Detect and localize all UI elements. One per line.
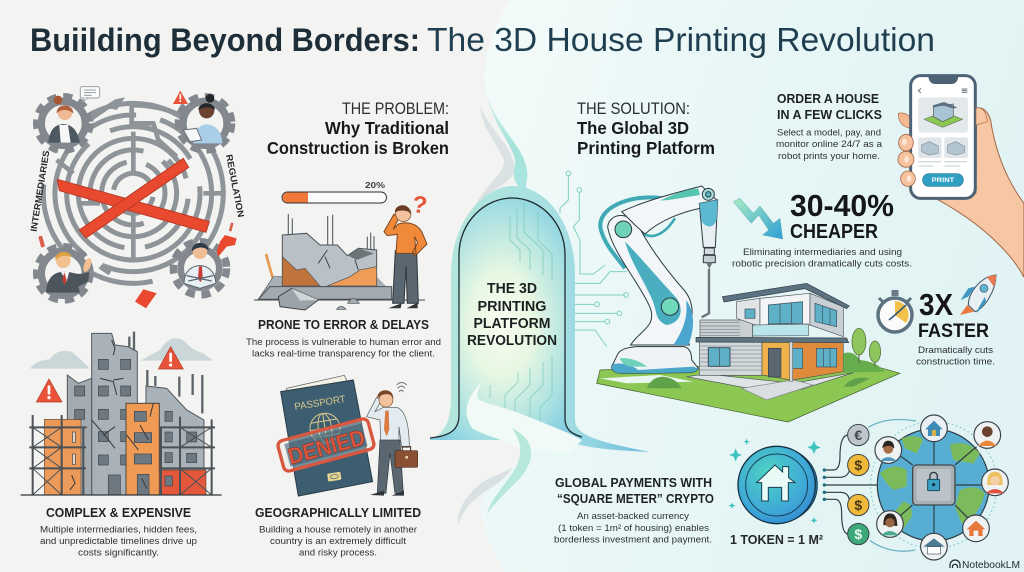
- coin symbols: €: [854, 427, 862, 443]
- icon: rocket: [960, 275, 996, 315]
- maze illustration: [18, 78, 249, 309]
- briefcase: [395, 447, 418, 467]
- maze spokes: [57, 105, 223, 273]
- text: global payments: [554, 476, 714, 546]
- robot base: [612, 347, 698, 373]
- red tape scraps: [38, 222, 237, 308]
- garden bushes: [843, 352, 885, 373]
- portal label: [467, 281, 557, 349]
- text: global payments: GLOBAL PAYMENTS WITH: [555, 476, 712, 490]
- door and windows: [768, 348, 781, 377]
- coin symbols: $: [854, 457, 862, 473]
- lower orange walls: [762, 342, 791, 380]
- description line 1: An asset-backed currency: [577, 511, 689, 522]
- description line 3: costs significantly.: [78, 548, 159, 558]
- description line 2: country is an extremely difficult: [270, 536, 406, 547]
- passport cover: [281, 380, 373, 496]
- coin symbols: $: [854, 526, 862, 542]
- safe: [913, 465, 955, 505]
- text: complex and expensive: COMPLEX & EXPENSIVE: [46, 506, 191, 520]
- heading line 1: The Global 3D: [577, 118, 689, 138]
- connector dots: [823, 468, 826, 501]
- coin caption: 1 TOKEN = 1 M²: [730, 533, 823, 547]
- description: The process is vulnerable to human error and: [246, 337, 441, 348]
- description line 1: Building a house remotely in another: [259, 524, 418, 536]
- description line 2: robotic precision dramatically cuts costs.: [732, 258, 912, 270]
- flowing stream: top: [484, 78, 530, 192]
- heading line 1: Why Traditional: [325, 118, 449, 138]
- circuit traces inside portal: [490, 203, 552, 424]
- lawn highlight: [600, 375, 693, 383]
- heading line 2: “SQUARE METER” CRYPTO: [557, 492, 714, 506]
- worker legs: [393, 251, 418, 303]
- flowing stream: top grey: [475, 105, 514, 205]
- label: intermediaries: INTERMEDIARIES: [29, 150, 51, 232]
- hand and arm: [938, 108, 1024, 277]
- coin: [738, 446, 817, 524]
- phone body: [911, 76, 975, 198]
- rebar on the ruins: [129, 332, 202, 413]
- mid slab: [696, 337, 849, 343]
- passport globe: [308, 411, 342, 445]
- text: order a house: ORDER A HOUSE: [777, 92, 879, 106]
- heading kicker: THE PROBLEM:: [342, 100, 449, 118]
- robot tool: [699, 200, 718, 247]
- right building: [146, 386, 204, 495]
- coin symbols: $: [854, 497, 862, 513]
- icon: savings down arrow: [733, 198, 783, 239]
- lawn: [597, 360, 900, 422]
- rubble left: [258, 277, 282, 299]
- heading line 2: Construction is Broken: [267, 138, 449, 158]
- traveller: [367, 382, 409, 496]
- gear: top-right person: [178, 94, 232, 150]
- stat label: FASTER: [918, 320, 989, 342]
- print button: [923, 174, 963, 186]
- stat: 3x faster: [916, 287, 995, 368]
- house upper left block: [737, 298, 760, 327]
- rocks: [278, 288, 318, 310]
- gear: top-left person: [37, 96, 90, 150]
- robot base stem: [673, 300, 693, 345]
- heading kicker: THE SOLUTION:: [577, 100, 690, 118]
- question mark: ?: [411, 191, 429, 220]
- maze rings: [18, 78, 249, 309]
- robot upper arm accent: [660, 188, 700, 201]
- portal label line 2: PRINTING: [478, 299, 546, 315]
- left orange building: [44, 419, 81, 495]
- description line 2: construction time.: [916, 356, 995, 368]
- clouds: [30, 338, 213, 369]
- node: person right: [982, 469, 1008, 496]
- worker sweater: [384, 214, 427, 256]
- description line 3: robot prints your home.: [778, 151, 880, 162]
- percent label: 20%: [365, 181, 385, 190]
- house slab: [687, 373, 853, 389]
- warning triangle: right: [158, 347, 183, 369]
- text: prone to error: [246, 318, 441, 360]
- text: order a house: [776, 92, 883, 162]
- heading: the problem: [267, 100, 449, 158]
- windows: [73, 359, 197, 495]
- robot joints: [615, 188, 714, 315]
- circuit traces right of portal: [560, 171, 628, 347]
- illustration: collapsed wall and confused worker: [254, 191, 429, 310]
- portal label line 3: PLATFORM: [474, 316, 550, 332]
- title: bold part: Buiilding Beyond Borders:: [30, 22, 420, 58]
- connector lines: [825, 435, 913, 534]
- scaffolding: [29, 415, 215, 495]
- gear: bottom-left person: [37, 247, 93, 300]
- description line 3: and risky process.: [299, 548, 377, 558]
- shovel: [266, 254, 274, 283]
- denied stamp: [277, 418, 375, 472]
- upper windows: [768, 302, 837, 327]
- walkway: [742, 380, 813, 400]
- description line 1: Eliminating intermediaries and using: [743, 247, 902, 258]
- cracks: [70, 340, 153, 490]
- worker head: [396, 206, 411, 222]
- robot lower arm: [608, 215, 692, 345]
- lower stream grey: [458, 468, 512, 525]
- phone model cards: [918, 137, 968, 158]
- phone nav: [918, 88, 967, 93]
- description line 2: monitor online 24/7 as a: [776, 139, 883, 150]
- phone list lines: [918, 162, 967, 166]
- coin house: [757, 465, 795, 501]
- description line 1: Dramatically cuts: [918, 345, 993, 356]
- continents: [880, 436, 985, 532]
- red cross-out: [57, 158, 209, 238]
- node: person lower left: [877, 511, 903, 537]
- orange center building: [126, 403, 159, 495]
- red block: [159, 470, 206, 495]
- description line 2: lacks real-time transparency for the client.: [252, 348, 435, 360]
- text: complex and expensive: [40, 506, 197, 558]
- background: solution side: [481, 0, 1024, 572]
- globe: [877, 429, 989, 541]
- title: [30, 22, 935, 59]
- trees: [852, 328, 881, 367]
- white wave at portal bottom: [467, 382, 582, 452]
- pillar: [790, 342, 793, 381]
- illustration: crumbling buildings: [21, 332, 222, 495]
- portal arch: [430, 198, 582, 440]
- passport chip: [327, 472, 342, 482]
- broken maze shard: [90, 97, 125, 120]
- description line 2: (1 token = 1m² of housing) enables: [558, 523, 709, 534]
- portal label: THE 3D: [487, 281, 537, 297]
- warning triangle: [173, 91, 188, 104]
- node: person top right: [974, 422, 1001, 448]
- portal halo: [432, 186, 650, 452]
- text: geographically limited: [255, 506, 421, 558]
- node: person upper left: [875, 437, 902, 463]
- sparkles: [729, 439, 821, 523]
- central portal: [430, 78, 650, 525]
- portal label line 4: REVOLUTION: [467, 333, 557, 349]
- stat label: CHEAPER: [790, 221, 878, 243]
- balcony glass: [753, 324, 808, 336]
- fingers: [898, 134, 915, 186]
- printed layers: [700, 320, 753, 338]
- heading: the solution: [577, 100, 715, 158]
- speech bubble: [80, 87, 100, 102]
- foundation: [258, 287, 392, 299]
- description line 2: and unpredictable timelines drive up: [40, 536, 197, 547]
- description line 3: borderless investment and payment.: [554, 534, 712, 546]
- padlock: [930, 472, 937, 479]
- node: house top: [921, 415, 947, 442]
- node: house lower right: [963, 515, 989, 542]
- coins: [848, 424, 869, 545]
- description line 1: Select a model, pay, and: [777, 128, 881, 138]
- house upper front: [760, 293, 810, 327]
- ruined wall: [282, 233, 377, 287]
- phone hero card: [918, 97, 968, 133]
- title: regular part: The 3D House Printing Revolution: [427, 22, 935, 59]
- palm behind phone: [898, 113, 912, 128]
- roof: [722, 283, 849, 309]
- illustration: robot arm printing a house: [597, 186, 900, 422]
- flow arrows: [868, 419, 916, 551]
- text: prone to error: PRONE TO ERROR & DELAYS: [258, 318, 429, 332]
- coin symbols: [854, 427, 862, 542]
- bush: [647, 377, 682, 388]
- passport word: PASSPORT: [294, 394, 346, 413]
- lower stream teal: [487, 428, 531, 514]
- token coin and global network: [729, 415, 1008, 560]
- thumb: [976, 108, 987, 125]
- globe dividers: [893, 440, 987, 540]
- heading line 2: IN A FEW CLICKS: [777, 108, 882, 122]
- robot lower arm accent: [625, 242, 681, 325]
- progress bar: 20%: [282, 181, 386, 203]
- rebar: [288, 214, 374, 250]
- text: geographically limited: GEOGRAPHICALLY LIMITED: [255, 506, 421, 520]
- robot upper arm: [622, 186, 717, 234]
- print button: PRINT: [932, 177, 954, 184]
- illustration: denied passport and traveller: [277, 375, 418, 496]
- dotted orbit: [871, 422, 997, 548]
- description line 1: Multiple intermediaries, hidden fees,: [40, 524, 197, 536]
- label: regulation: REGULATION: [224, 153, 246, 218]
- notebooklm watermark: NotebookLM: [962, 560, 1020, 571]
- node: house bottom: [921, 533, 947, 560]
- icon: stopwatch: [878, 290, 912, 332]
- ground line: [21, 493, 222, 497]
- lower striped block: [699, 342, 762, 375]
- robot outer sweep: [600, 197, 663, 268]
- tall building: [92, 333, 137, 495]
- exposed brick: [282, 257, 320, 286]
- phone notch: [928, 77, 958, 84]
- warning triangle: left: [36, 379, 62, 402]
- phone and hand: [898, 76, 1024, 277]
- fingernails: [902, 139, 911, 182]
- phone hero house: [924, 102, 963, 127]
- heading line 2: Printing Platform: [577, 138, 715, 158]
- robot inner sweep under upper arm: [640, 218, 675, 236]
- left building: [67, 375, 92, 495]
- stat: 3x faster: 3X: [919, 287, 953, 322]
- maze top extension: [132, 105, 187, 120]
- gear: bottom-right person: [173, 242, 227, 295]
- stamp word: DENIED: [285, 424, 368, 469]
- stat: 30-40% cheaper: 30-40%: [790, 188, 894, 223]
- passport pages: [287, 375, 347, 394]
- stat: 30-40% cheaper: [732, 188, 912, 270]
